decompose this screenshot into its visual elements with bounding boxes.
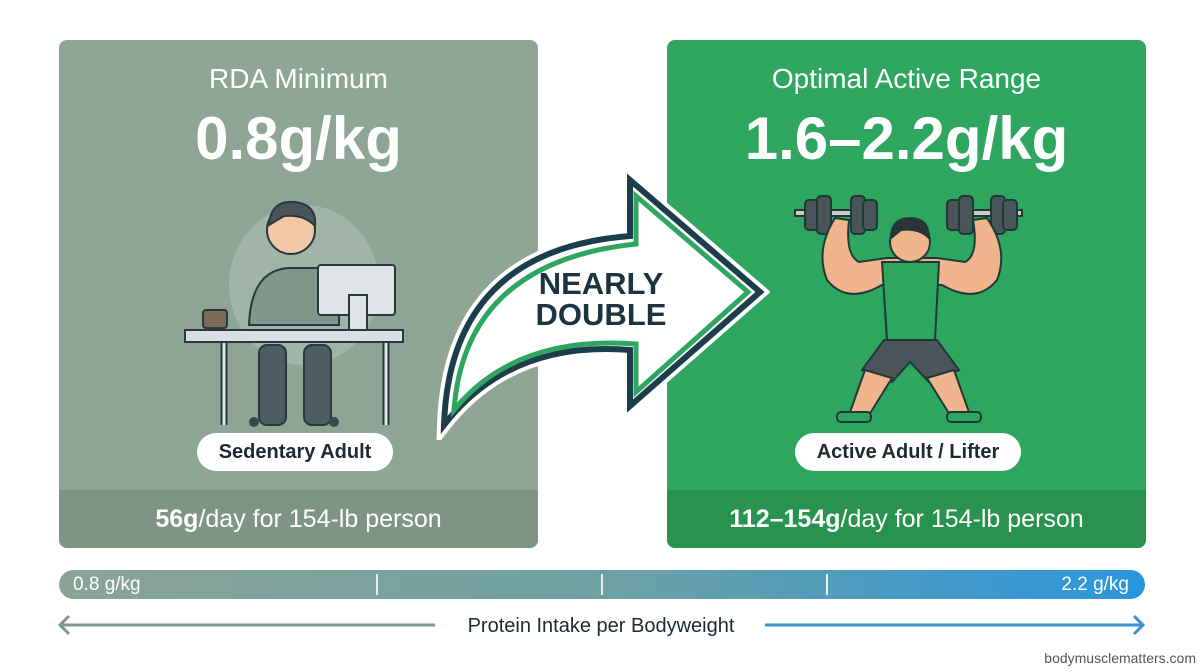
panel: RDA minimum: [59, 40, 538, 548]
label: Active Adult / Lifter: [795, 433, 1021, 471]
value: 0.8g/kg: 0.8g/kg: [195, 105, 402, 172]
label: Sedentary Adult: [197, 433, 393, 471]
label: Sedentary Adult: Sedentary Adult: [219, 441, 371, 463]
arrow: nearly double: [436, 174, 770, 440]
arrow text: NEARLY: [539, 266, 664, 301]
arrow text second line: DOUBLE: [536, 297, 666, 332]
axis arrow: protein intake per bodyweight: Protein Intake per Bodyweight: [468, 615, 735, 637]
panel: optimal active range: [667, 40, 1146, 548]
label: 0.8 g/kg: 0.8 g/kg: [73, 574, 141, 595]
value: 1.6–2.2g/kg: 1.6–2.2g/kg: [745, 105, 1068, 172]
footer: 56g/day: 56g/day for 154-lb person: [155, 505, 442, 533]
illustration: lifter with dumbbells: [794, 195, 1023, 423]
watermark: bodymusclematters.com: [1044, 650, 1196, 666]
footer: 112–154g/day: [667, 490, 1146, 548]
footer: 112–154g/day: 112–154g/day for 154-lb person: [729, 505, 1084, 533]
heading: Optimal Active Range: Optimal Active Range: [772, 63, 1041, 94]
label: Active Adult / Lifter: Active Adult / Lifter: [817, 441, 999, 463]
illustration: sedentary adult at desk: [184, 200, 404, 427]
axis arrow: protein intake per bodyweight: [58, 615, 1145, 637]
label: 2.2 g/kg: 2.2 g/kg: [1061, 574, 1129, 595]
footer: 56g/day: [59, 490, 538, 548]
heading: RDA Minimum: RDA Minimum: [209, 63, 388, 94]
scale bar: [59, 570, 1145, 599]
